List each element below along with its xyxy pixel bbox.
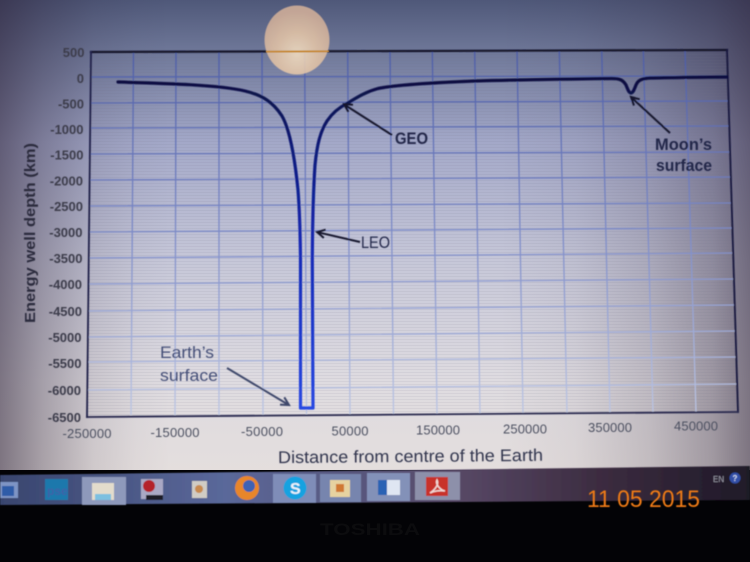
y axis tick labels: -1000 (50, 122, 84, 137)
y axis tick labels: -5000 (48, 330, 82, 345)
grid lines (88, 50, 737, 415)
active button: explorer (82, 477, 126, 505)
annotation: Earth's surface: surface (160, 366, 218, 385)
icon: red app (141, 479, 163, 500)
x axis title: Distance from centre of the Earth (278, 446, 543, 467)
system tray: ? (732, 474, 738, 483)
icon: firefox (235, 476, 259, 500)
system tray: EN (713, 475, 724, 484)
x axis tick labels: -250000 (62, 426, 112, 441)
y axis tick labels: -6500 (48, 410, 81, 425)
y axis tick labels: -3500 (49, 251, 82, 266)
annotation: LEO: LEO (361, 233, 390, 252)
y axis tick labels: 0 (77, 71, 84, 86)
laptop bezel (0, 470, 750, 562)
y axis tick labels: -2500 (50, 199, 83, 214)
icon: pse: pse (47, 484, 68, 498)
annotation: Moon's surface (631, 97, 712, 175)
button: word (367, 473, 410, 501)
x axis tick labels: 50000 (332, 424, 368, 438)
camera flash reflection (264, 6, 330, 74)
annotation: Moon's surface: surface (656, 156, 712, 175)
x axis tick labels: 150000 (416, 422, 460, 438)
plot frame (87, 50, 738, 417)
icon: pse (45, 479, 68, 500)
button: skype: S (290, 481, 301, 498)
y axis tick labels: -3000 (49, 225, 82, 240)
annotation: Earth's surface: Earth’s (160, 343, 214, 362)
annotation: GEO (344, 104, 428, 148)
x axis tick labels: 450000 (674, 418, 718, 434)
icon: system (0, 482, 18, 498)
x axis tick labels: -50000 (241, 424, 283, 439)
bezel brand text: TOSHIBA (320, 520, 420, 539)
x axis tick labels (62, 418, 718, 441)
annotation: LEO (317, 230, 390, 252)
annotation: GEO: GEO (395, 129, 428, 148)
y axis tick labels: 500 (63, 45, 84, 60)
y axis tick labels: -1500 (50, 148, 84, 162)
y axis title: Energy well depth (km) (22, 143, 39, 323)
y axis tick labels: -500 (58, 96, 84, 112)
energy well curve (118, 77, 727, 408)
date stamp: 11 05 2015 (587, 486, 700, 513)
y axis tick labels: -4000 (49, 277, 82, 292)
y axis tick labels (48, 45, 84, 425)
y axis tick labels: -4500 (49, 304, 82, 319)
button: photo app (320, 474, 361, 502)
icon: document (192, 481, 207, 498)
button: pdf (415, 472, 460, 500)
flash crossing the top frame line (266, 51, 329, 52)
button: skype (273, 474, 316, 503)
taskbar (0, 466, 750, 505)
system tray (713, 472, 740, 484)
x axis tick labels: 250000 (503, 422, 547, 436)
y axis tick labels: -6000 (48, 383, 81, 398)
y axis tick labels: -2000 (50, 174, 83, 188)
chart (22, 45, 738, 467)
x axis tick labels: -150000 (150, 425, 200, 440)
y axis tick labels: -5500 (48, 356, 82, 371)
x axis tick labels: 350000 (588, 420, 632, 435)
annotation: Moon's surface: Moon’s (655, 135, 712, 154)
annotation: Earth's surface (160, 343, 289, 405)
